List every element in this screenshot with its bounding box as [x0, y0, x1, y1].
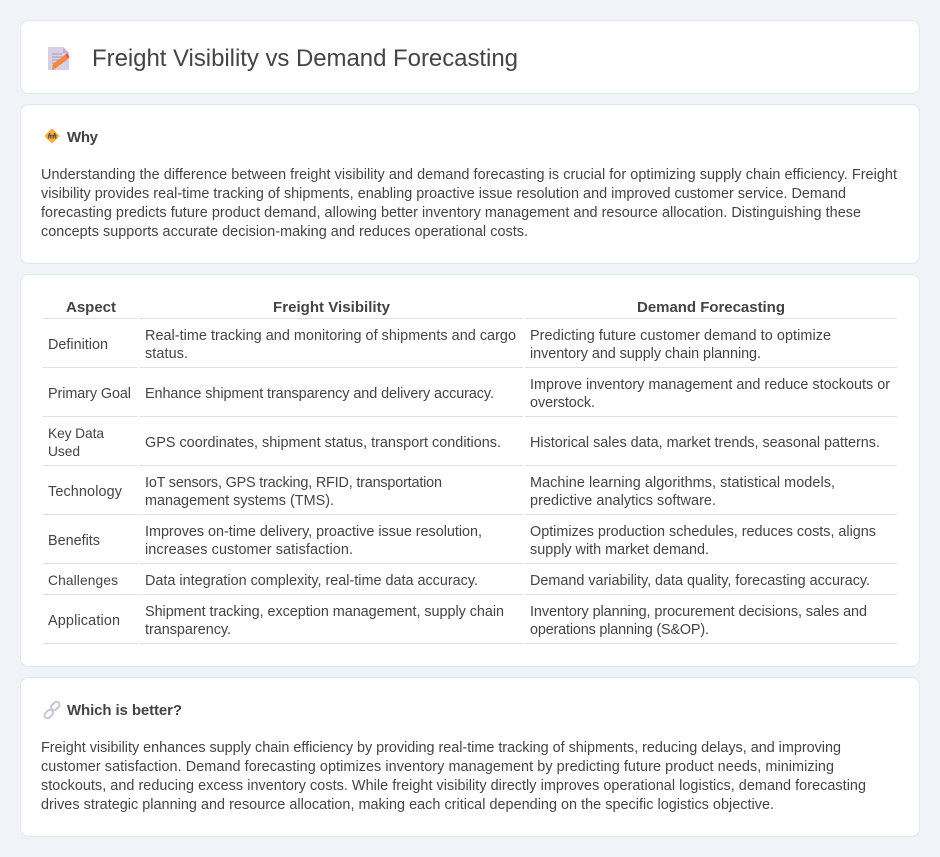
table row: challenges: Challenges: [48, 573, 118, 588]
table row: definition: inventory and supply chain planning.: [530, 346, 761, 362]
table row: benefits: supply with market demand.: [530, 542, 709, 558]
table row: key data used: Historical sales data, market trends, seasonal patterns.: [530, 435, 880, 451]
table row: technology: Technology: [48, 484, 123, 500]
table row: primary goal: Primary Goal: [48, 386, 131, 402]
icon: warning diamond: [44, 128, 60, 144]
text block: which is better paragraph: drives strategic planning and resource allocation, making each critical depending on the specific logistics objective.: [41, 797, 774, 813]
panel: which is better: [20, 678, 920, 836]
table row: definition: status.: [145, 346, 188, 362]
heading: why: Why: [67, 129, 99, 146]
table row: definition: [48, 328, 831, 362]
text block: why paragraph: concepts supports accurate decision-making and reduces operational costs.: [41, 224, 528, 240]
table row: application: Application: [48, 613, 120, 629]
table row: benefits: [48, 524, 876, 558]
table row: technology: Machine learning algorithms, statistical models,: [530, 475, 835, 491]
panel: title header: [20, 20, 920, 94]
text block: why paragraph: Understanding the difference between freight visibility and demand forecasting is crucial for optimizing supply chain efficiency. Freight: [41, 167, 897, 183]
text block: why paragraph: [41, 167, 897, 240]
table header row: Aspect: [66, 299, 116, 316]
table row: definition: Definition: [48, 337, 108, 353]
table row: technology: IoT sensors, GPS tracking, RFID, transportation: [145, 475, 442, 491]
icon: chain link: [43, 701, 61, 719]
table row: primary goal: [48, 377, 890, 411]
table row: application: [48, 604, 867, 638]
table row: key data used: Key Data: [48, 426, 104, 441]
table row: application: Inventory planning, procurement decisions, sales and: [530, 604, 867, 620]
table row: benefits: Optimizes production schedules, reduces costs, aligns: [530, 524, 876, 540]
table row: key data used: Used: [48, 444, 80, 459]
table row: challenges: [48, 573, 870, 589]
table row: definition: Real-time tracking and monitoring of shipments and cargo: [145, 328, 516, 344]
text block: why paragraph: forecasting predicts future product demand, allowing better inventory management and resource allocation. Distinguishing these: [41, 205, 861, 221]
table row: benefits: increases customer satisfaction.: [145, 542, 353, 558]
table row: challenges: Data integration complexity, real-time data accuracy.: [145, 573, 478, 589]
text block: which is better paragraph: customer satisfaction. Demand forecasting optimizes inventory management by predicting future product needs, minimizing: [41, 759, 834, 775]
icon: document with pencil: [48, 47, 70, 70]
table row: primary goal: Improve inventory management and reduce stockouts or: [530, 377, 890, 393]
text block: which is better paragraph: stockouts, and reducing excess inventory costs. While freight visibility directly improves operational logistics, demand forecasting: [41, 778, 866, 794]
text block: which is better paragraph: Freight visibility enhances supply chain efficiency by providing real-time tracking of shipments, reducing delays, and improving: [41, 740, 841, 756]
table row: key data used: GPS coordinates, shipment status, transport conditions.: [145, 435, 501, 451]
table header row: [66, 299, 785, 316]
heading: which is better: Which is better?: [67, 702, 182, 719]
table row: benefits: Benefits: [48, 533, 100, 549]
table row: primary goal: overstock.: [530, 395, 595, 411]
panel: comparison table: [20, 274, 920, 666]
text block: which is better paragraph: [41, 740, 866, 813]
table row: application: transparency.: [145, 622, 231, 638]
table header row: Demand Forecasting: [637, 299, 785, 316]
table row: technology: management systems (TMS).: [145, 493, 334, 509]
table row: technology: predictive analytics software.: [530, 493, 716, 509]
panel: why: [20, 104, 920, 264]
table header row: Freight Visibility: [273, 299, 391, 316]
title: Freight Visibility vs Demand Forecasting: [92, 45, 518, 72]
table row: challenges: Demand variability, data quality, forecasting accuracy.: [530, 573, 870, 589]
table row: application: Shipment tracking, exception management, supply chain: [145, 604, 504, 620]
text block: why paragraph: visibility provides real-time tracking of shipments, enabling proactive issue resolution and improved customer service. Demand: [41, 186, 846, 202]
table row: application: operations planning (S&OP).: [530, 622, 709, 638]
table row: key data used: [48, 426, 880, 459]
table row: definition: Predicting future customer demand to optimize: [530, 328, 831, 344]
table row: benefits: Improves on-time delivery, proactive issue resolution,: [145, 524, 482, 540]
table row: technology: [48, 475, 835, 509]
table row: primary goal: Enhance shipment transparency and delivery accuracy.: [145, 386, 494, 402]
